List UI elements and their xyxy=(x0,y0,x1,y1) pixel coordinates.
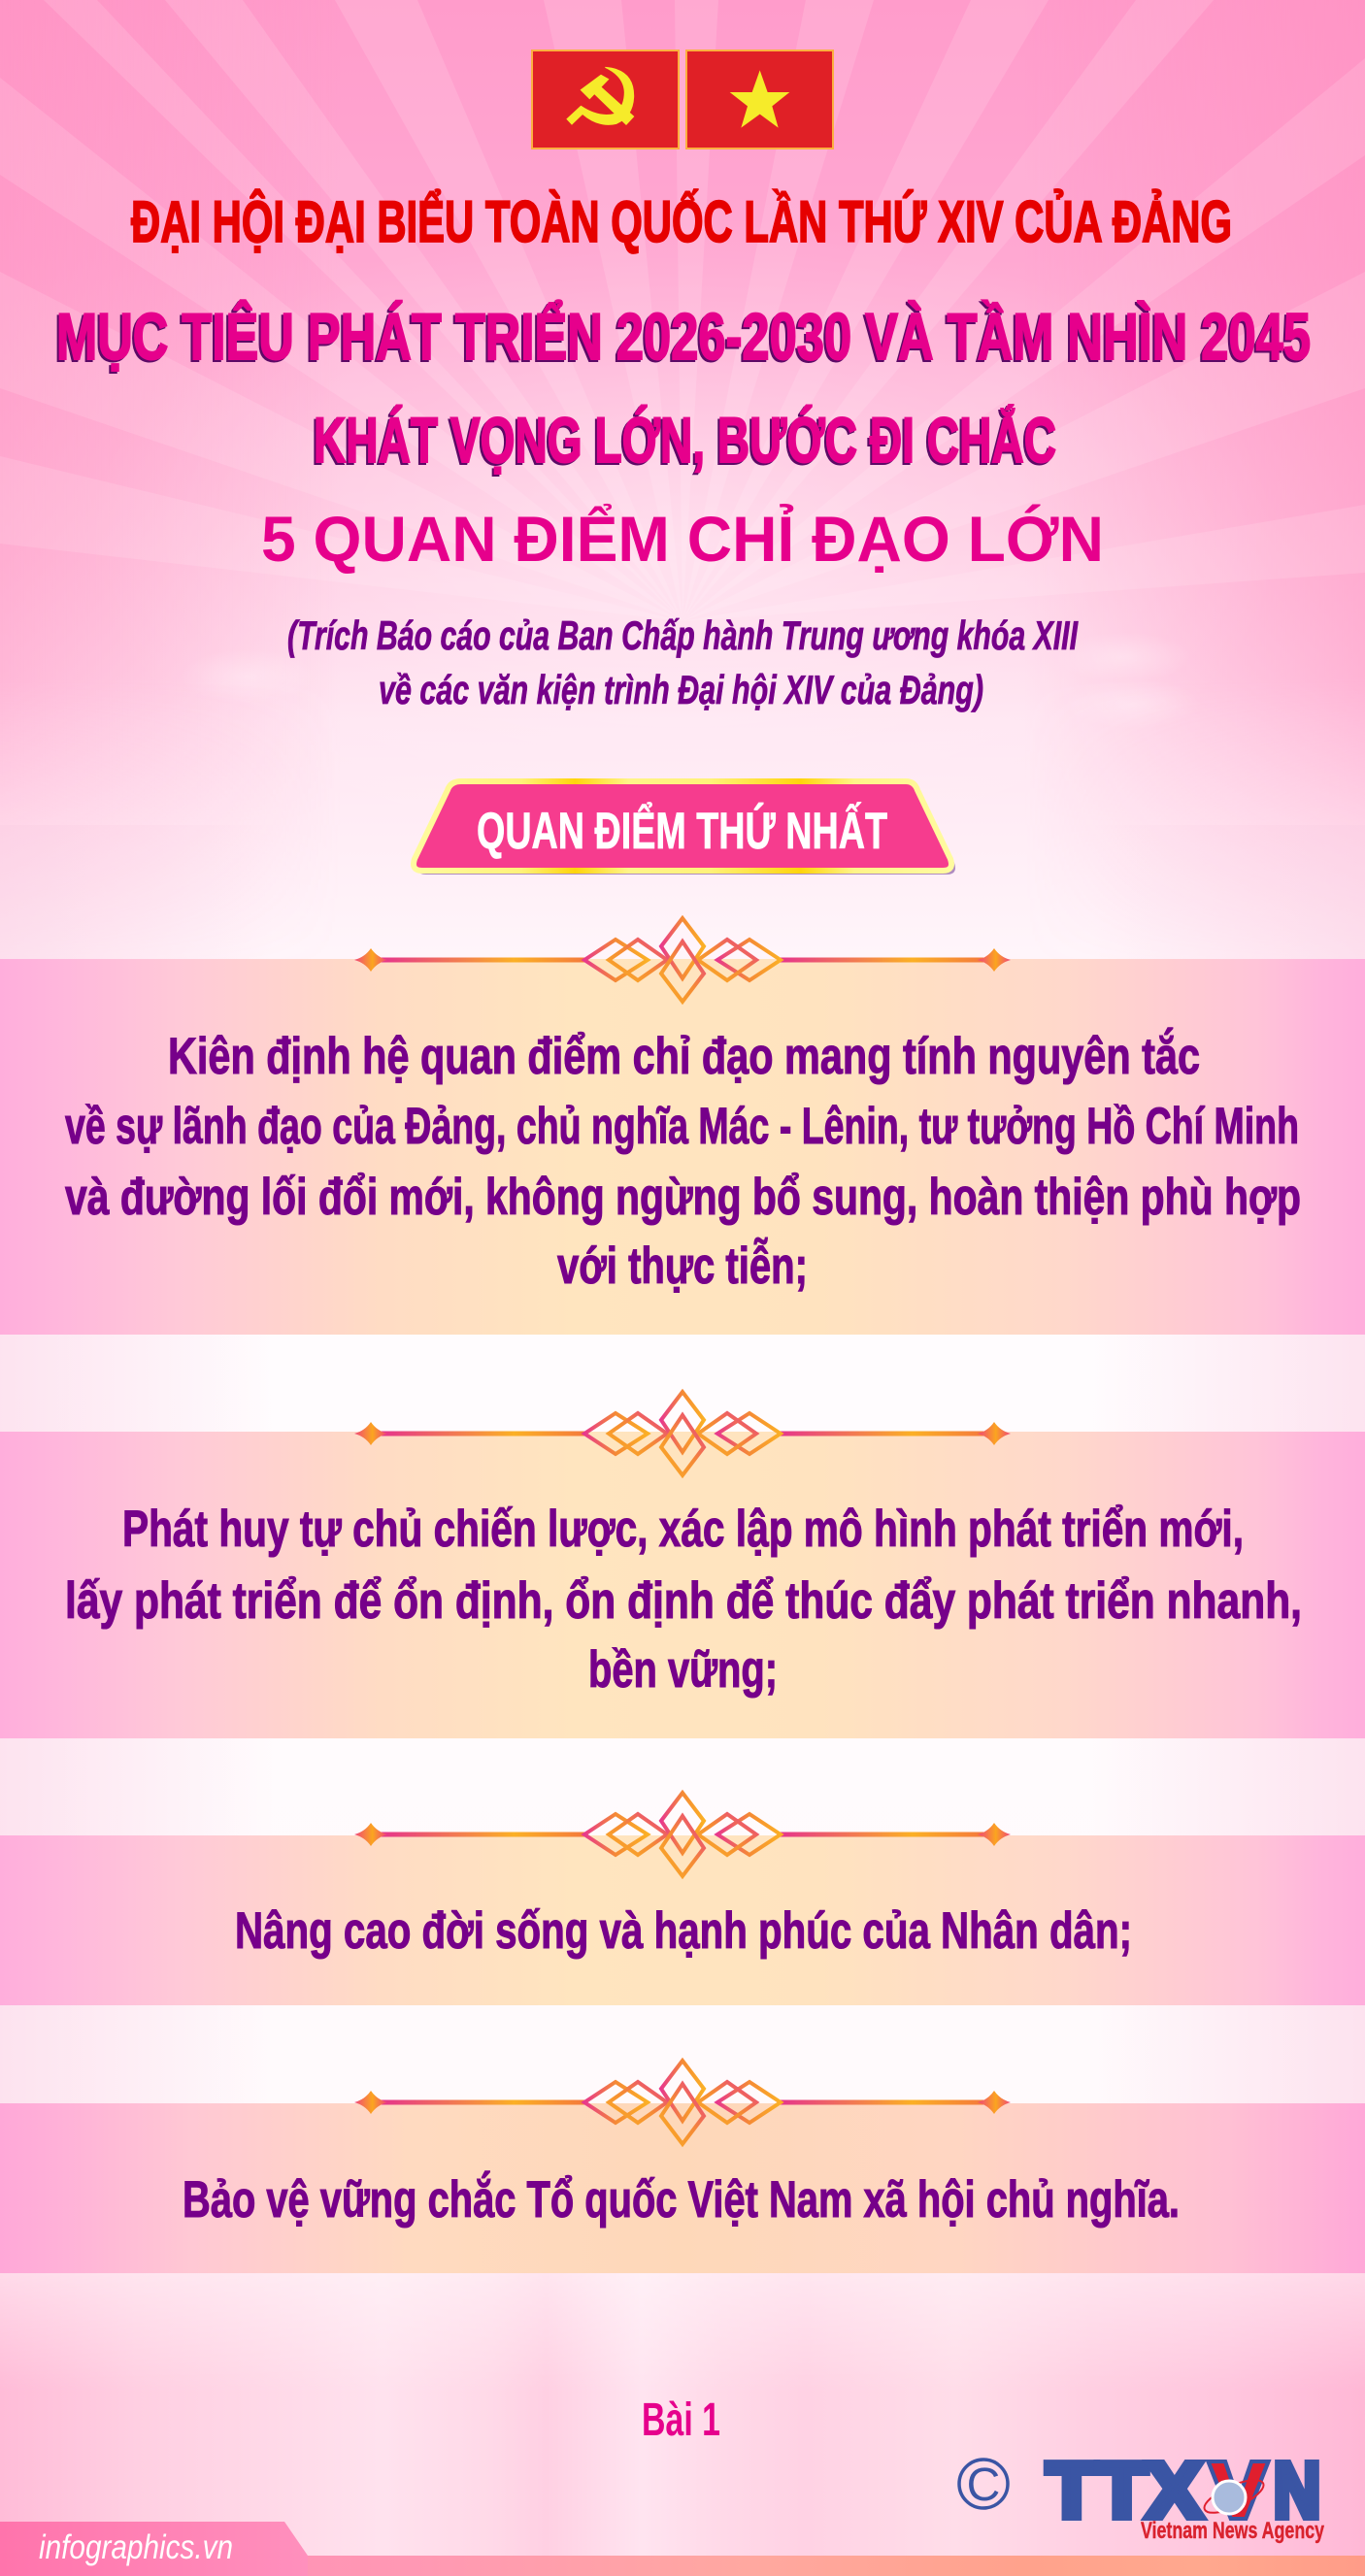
logo: TTXVN: N xyxy=(1274,2447,1320,2533)
panel 1 xyxy=(0,918,1365,1335)
flag: party hammer and sickle xyxy=(532,50,679,149)
copyright mark: C xyxy=(967,2460,1000,2511)
panel 2 xyxy=(0,1392,1365,1738)
panel 4 xyxy=(0,2061,1365,2273)
ornament divider xyxy=(354,1793,1011,1876)
logo: TTXVN: TTX xyxy=(1047,2447,1202,2533)
ornament divider xyxy=(354,1392,1011,1475)
logo: TTXVN xyxy=(1047,2447,1324,2544)
ornament divider xyxy=(354,2061,1011,2144)
subtitle: source note: về các văn kiện trình Đại hội XIV của Đảng) xyxy=(379,667,983,712)
subtitle: source note: (Trích Báo cáo của Ban Chấp hành Trung ương khóa XIII xyxy=(287,612,1079,658)
icon: hammer and sickle xyxy=(567,67,634,124)
icon: yellow star xyxy=(730,70,789,128)
copyright mark xyxy=(959,2460,1008,2511)
panel 1 text xyxy=(65,1027,1301,1295)
subtitle: source note xyxy=(287,612,1079,712)
title: slogan: KHÁT VỌNG LỚN, BƯỚC ĐI CHẮC xyxy=(314,404,1056,476)
footer tab: site name xyxy=(0,2522,308,2576)
logo: TTXVN: V xyxy=(1211,2447,1266,2533)
panel 3 xyxy=(0,1793,1365,2005)
ornament divider xyxy=(354,918,1011,1002)
sunburst rays xyxy=(0,0,1365,621)
panel 2 text xyxy=(65,1501,1302,1699)
part label: Bài 1 xyxy=(642,2394,720,2446)
panel 2 text: bền vững; xyxy=(588,1641,778,1699)
footer strip xyxy=(0,2556,1365,2576)
title: five viewpoints: 5 QUAN ĐIỂM CHỈ ĐẠO LỚN xyxy=(261,503,1104,575)
footer tab: site name: infographics.vn xyxy=(39,2528,233,2566)
panel 1 text: với thực tiễn; xyxy=(557,1237,808,1295)
badge: first viewpoint xyxy=(414,781,955,875)
flag: Vietnam star xyxy=(686,50,833,149)
icon: globe with orbit xyxy=(1200,2474,1268,2519)
curtain at bottom xyxy=(0,2273,1365,2564)
badge: first viewpoint: QUAN ĐIỂM THỨ NHẤT xyxy=(477,802,887,860)
central glow xyxy=(81,214,1284,874)
soft light spots xyxy=(180,632,1200,729)
